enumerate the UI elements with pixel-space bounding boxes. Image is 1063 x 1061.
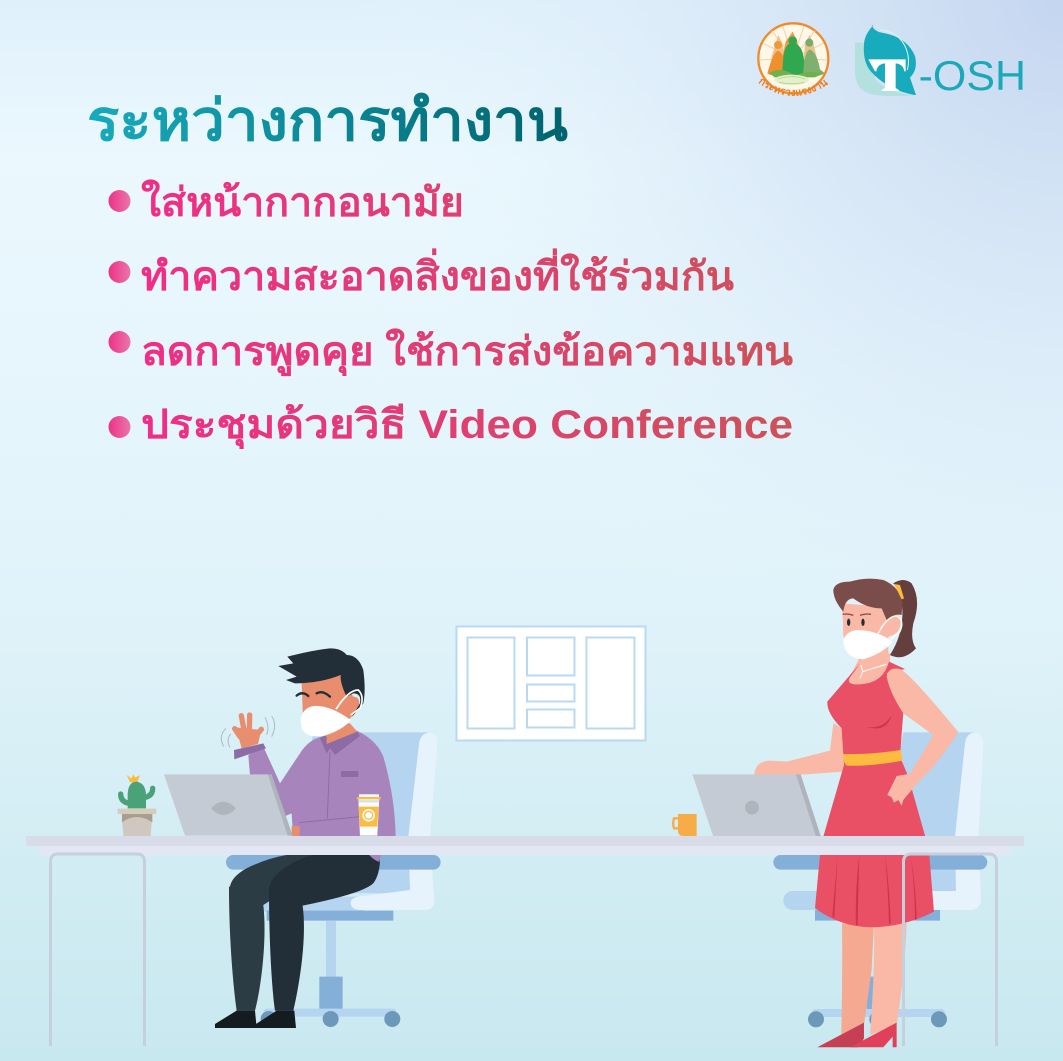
woman's arm on laptop <box>754 723 844 775</box>
man's shirt <box>234 731 396 862</box>
woman's hair back <box>890 580 917 657</box>
man wearing a mask <box>215 648 396 1028</box>
man's legs <box>215 855 380 1028</box>
woman's arm on hip <box>887 669 958 806</box>
woman's office chair <box>773 732 987 1027</box>
woman wearing a mask <box>754 579 958 1047</box>
woman's neck <box>849 653 890 684</box>
coffee cup <box>357 794 381 836</box>
woman's laptop <box>692 774 821 837</box>
bullet 2: ทำความสะอาดสิ่งของที่ใช้ร่วมกัน <box>141 248 734 299</box>
logo: ministry of labour seal <box>757 22 830 96</box>
title: ระหว่างการทำงาน <box>87 89 568 153</box>
cactus plant <box>118 774 156 836</box>
red dress <box>815 662 934 927</box>
man's waving hand <box>221 715 275 748</box>
logo: T-OSH: -OSH <box>919 53 1026 99</box>
bullet 3: ลดการพูดคุย ใช้การส่งข้อความแทน <box>141 328 793 377</box>
man's office chair <box>226 732 441 1027</box>
bullet list <box>108 179 793 450</box>
man's head and mask <box>278 648 365 744</box>
bullet 4: ประชุมด้วยวิธี Video Conference <box>141 403 793 450</box>
woman's legs and shoes <box>817 923 907 1047</box>
woman's head and mask <box>833 579 904 659</box>
logo: ministry of labour seal: กระทรวงแรงงาน <box>758 78 828 96</box>
man's laptop <box>164 774 293 836</box>
bullet 1: ใส่หน้ากากอนามัย <box>141 179 464 225</box>
woman's belt <box>843 750 903 766</box>
wall board <box>456 626 646 740</box>
desk <box>26 836 1024 1046</box>
logo: T-OSH <box>855 25 1026 99</box>
woman's necklace <box>860 664 887 678</box>
orange mug <box>673 814 697 836</box>
